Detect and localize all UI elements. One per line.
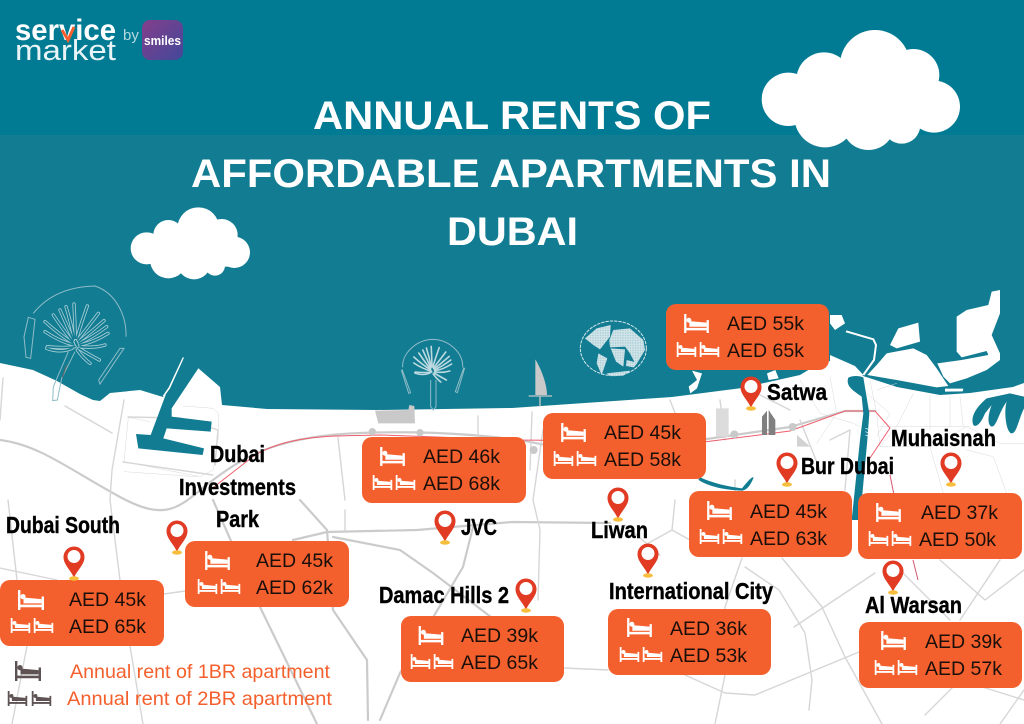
metro line	[210, 411, 890, 490]
Dubai Water Canal and small islets	[689, 370, 779, 491]
cloud: large	[762, 30, 960, 150]
label: Muhaisnah: Muhaisnah	[891, 425, 996, 451]
pin: Al Warsan	[882, 560, 904, 595]
panel: Dubai South rents	[0, 580, 164, 646]
label: JVC: JVC	[461, 514, 497, 540]
label: Satwa: Satwa	[767, 379, 827, 405]
label: Damac Hills 2: Damac Hills 2	[379, 582, 509, 608]
panel: JVC rents: AED 68k	[423, 473, 500, 495]
title: AFFORDABLE APARTMENTS IN	[191, 152, 831, 196]
panel: Liwan rents: AED 58k	[604, 449, 681, 471]
panel: Muhaisnah rents	[858, 493, 1022, 559]
title: ANNUAL RENTS OF	[313, 94, 711, 138]
panel: Bur Dubai rents: AED 45k	[750, 501, 827, 523]
pin: Dubai South	[64, 546, 84, 581]
panel: Damac Hills 2 rents	[401, 616, 564, 682]
panel: International City rents	[608, 609, 771, 675]
panel: International City rents: AED 53k	[670, 645, 747, 667]
label: Liwan: Liwan	[591, 517, 648, 543]
panel: Muhaisnah rents: AED 37k	[921, 502, 998, 524]
cloud: small	[131, 207, 250, 279]
palm jebel ali outline	[24, 286, 126, 401]
pin: Bur Dubai	[776, 452, 798, 487]
pin: Liwan	[608, 488, 628, 522]
label: Dubai Investments Park: Dubai	[210, 441, 265, 467]
label: Dubai South: Dubai South	[6, 512, 120, 538]
panel: Al Warsan rents: AED 39k	[925, 631, 1002, 653]
panel: Satwa rents: AED 55k	[727, 313, 804, 335]
label: Bur Dubai: Bur Dubai	[801, 453, 894, 479]
land mass	[0, 360, 1024, 724]
legend: Annual rent of 2BR apartment	[67, 688, 333, 710]
panel: Al Warsan rents	[859, 622, 1022, 688]
label: Al Warsan: Al Warsan	[865, 592, 962, 618]
logo: by	[123, 27, 139, 44]
world islands	[580, 321, 646, 376]
panel: Satwa rents: AED 65k	[727, 340, 804, 362]
panel: Dubai Investments Park rents	[185, 541, 349, 607]
legend	[8, 661, 333, 710]
Jebel Ali port	[124, 357, 218, 477]
panel: Damac Hills 2 rents: AED 39k	[461, 625, 538, 647]
panel: Liwan rents	[543, 413, 706, 479]
panel: Bur Dubai rents	[689, 491, 852, 557]
legend: Annual rent of 1BR apartment	[70, 661, 331, 683]
pin: Muhaisnah	[940, 452, 962, 487]
panel: Liwan rents: AED 45k	[604, 422, 681, 444]
background: top band	[0, 0, 1024, 135]
panel: Dubai South rents: AED 65k	[69, 616, 146, 638]
logo	[15, 14, 183, 67]
pin: Damac Hills 2	[516, 578, 536, 613]
panel: International City rents: AED 36k	[670, 618, 747, 640]
panel: Satwa rents	[666, 304, 829, 370]
pin: International City	[638, 544, 658, 578]
panel: JVC rents	[362, 437, 526, 503]
title	[191, 94, 831, 254]
logo: smiles	[144, 34, 181, 48]
panel: Muhaisnah rents: AED 50k	[919, 529, 996, 551]
panel: Al Warsan rents: AED 57k	[925, 658, 1002, 680]
panel: Dubai South rents: AED 45k	[69, 589, 146, 611]
panel: Dubai Investments Park rents: AED 62k	[256, 577, 333, 599]
title: DUBAI	[447, 210, 578, 254]
panel: JVC rents: AED 46k	[423, 446, 500, 468]
label: Dubai Investments Park: Investments	[179, 474, 296, 500]
pin: Dubai Investments Park	[166, 520, 188, 555]
label: Dubai Investments Park	[179, 441, 296, 532]
pin: Satwa	[740, 376, 762, 411]
roads	[0, 377, 1024, 724]
pin: JVC	[434, 510, 456, 545]
panel: Damac Hills 2 rents: AED 65k	[461, 652, 538, 674]
panel: Dubai Investments Park rents: AED 45k	[256, 550, 333, 572]
logo: service	[15, 14, 116, 47]
Burj Al Arab and towers	[529, 359, 810, 454]
label: International City: International City	[609, 578, 773, 604]
label: Dubai Investments Park: Park	[216, 506, 259, 532]
panel: Bur Dubai rents: AED 63k	[750, 528, 827, 550]
creek and Deira coast	[830, 290, 1024, 520]
palm jumeirah outline	[369, 339, 465, 436]
logo: market	[15, 35, 116, 67]
